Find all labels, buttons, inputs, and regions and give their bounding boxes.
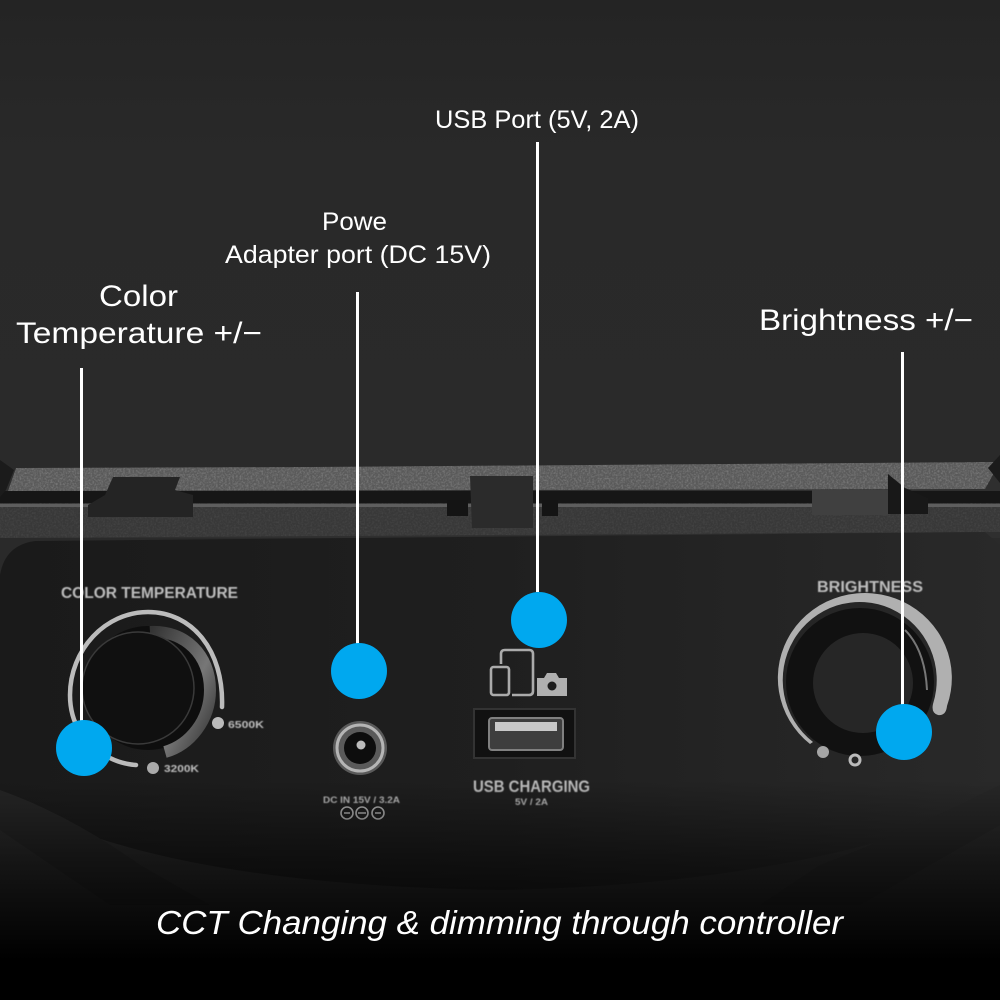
6500K marker: 6500K <box>228 720 265 731</box>
caption: CCT Changing & dimming through controller <box>156 904 845 941</box>
bottom black <box>0 960 1000 1000</box>
label: DC IN: DC IN 15V / 3.2A <box>323 795 400 806</box>
leader line <box>901 352 904 706</box>
callout text: Brightness +/− <box>759 304 973 337</box>
lower body edge left <box>0 790 210 905</box>
callout: power adapter <box>225 208 491 699</box>
callout text <box>225 208 491 269</box>
color temperature control <box>61 585 265 775</box>
USB charging port <box>473 650 590 808</box>
label: COLOR TEMPERATURE: COLOR TEMPERATURE <box>61 585 238 602</box>
lower body edge right <box>760 785 1000 905</box>
bottom fade <box>0 780 1000 960</box>
jack socket <box>333 721 387 775</box>
USB socket <box>474 709 575 758</box>
dial arc <box>778 593 952 744</box>
knob cap <box>813 633 913 733</box>
3200K marker <box>147 762 200 775</box>
blue marker <box>56 720 112 776</box>
callout text: Temperature +/− <box>16 317 262 350</box>
callout text: Color <box>99 280 178 313</box>
3200K marker: 3200K <box>164 764 200 775</box>
blue marker <box>511 592 567 648</box>
callout text: Powe <box>322 208 387 236</box>
leader line <box>536 142 539 592</box>
rim notches <box>88 477 193 517</box>
callout text: Adapter port (DC 15V) <box>225 241 491 269</box>
blue marker <box>876 704 932 760</box>
max dot <box>850 755 860 765</box>
DC power jack <box>323 721 400 819</box>
brightness control <box>778 579 952 765</box>
device body <box>0 455 1000 905</box>
leader line <box>356 292 359 644</box>
label: USB CHARGING: USB CHARGING <box>473 777 590 796</box>
knob well <box>786 608 934 756</box>
callout text: USB Port (5V, 2A) <box>435 106 639 134</box>
min dot <box>817 746 829 758</box>
knob grip <box>86 626 210 750</box>
callout: USB port <box>435 106 639 648</box>
icon: tablet, phone, camera <box>491 650 567 696</box>
leader line <box>80 368 83 722</box>
6500K marker <box>212 717 265 731</box>
polarity symbol <box>341 807 384 819</box>
callout: brightness <box>759 304 973 760</box>
label: 5V / 2A: 5V / 2A <box>515 797 548 808</box>
callout: color temperature <box>16 280 262 776</box>
blue marker <box>331 643 387 699</box>
callout text <box>16 280 262 350</box>
knob highlight <box>905 630 927 690</box>
dial arc <box>70 612 222 765</box>
top rim of device <box>0 455 1000 538</box>
knob cap <box>82 632 194 744</box>
control panel face <box>0 532 1000 890</box>
label: BRIGHTNESS: BRIGHTNESS <box>817 579 923 596</box>
